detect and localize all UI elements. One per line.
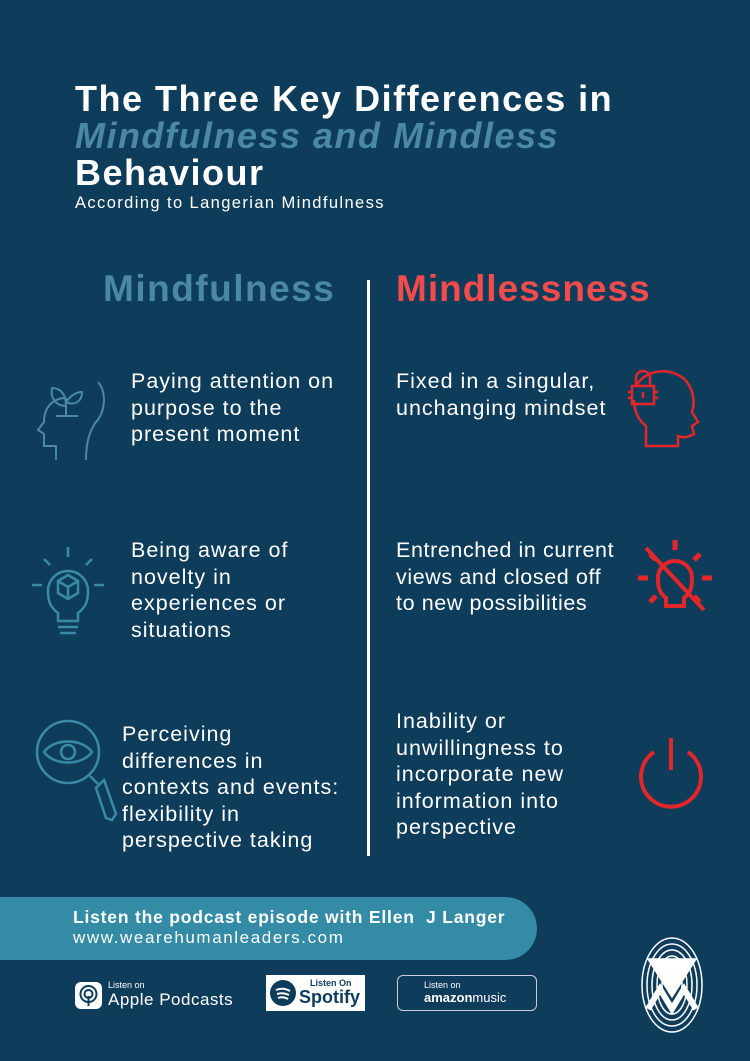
heading: Mindfulness: Mindfulness (103, 268, 335, 309)
text: mindless 3: incorporate new (396, 762, 564, 786)
badge: spotify (266, 975, 365, 1011)
badge: spotify: Spotify (299, 987, 360, 1007)
text: mindful 2: novelty in (131, 564, 232, 588)
text: mindless 3: perspective (396, 815, 517, 839)
badge: apple podcasts (75, 980, 233, 1009)
badge: amazon music (397, 975, 537, 1011)
badge: apple podcasts: Apple Podcasts (108, 990, 233, 1009)
text: mindless 2 (396, 538, 614, 615)
text: mindless 3: information into (396, 788, 559, 812)
icon: power (639, 738, 703, 809)
text: mindless 1: unchanging mindset (396, 396, 606, 420)
icon: lightbulb (32, 547, 104, 634)
text: mindful 3: differences in (122, 748, 264, 772)
icon: crossed lightbulb (638, 540, 712, 612)
text: mindful 3: flexibility in (122, 802, 240, 826)
text: mindful 3: perspective taking (122, 828, 313, 852)
banner text: Listen the podcast episode with Ellen J Langer (73, 907, 505, 927)
text: mindful 3: Perceiving (122, 722, 232, 746)
badge: amazon music: amazonmusic (424, 990, 506, 1005)
podcast banner (0, 897, 537, 960)
podcast banner: www.wearehumanleaders.com (73, 928, 344, 947)
text: mindful 2 (131, 538, 288, 642)
text: mindful 3 (122, 722, 339, 852)
heading: Mindlessness: Mindlessness (396, 268, 651, 309)
badge: spotify: Listen On (310, 978, 352, 988)
icon: head with plant (36, 382, 105, 460)
title: The Three Key Differences in (75, 78, 613, 119)
text: mindful 2: situations (131, 618, 232, 642)
text: mindful 3: contexts and events: (122, 775, 339, 799)
icon: locked head (628, 370, 700, 448)
text: mindful 1: present moment (131, 422, 300, 446)
title (75, 78, 613, 212)
text: mindful 2: Being aware of (131, 538, 288, 562)
title: According to Langerian Mindfulness (75, 194, 385, 212)
text: mindful 1: Paying attention on (131, 369, 334, 393)
text: mindful 1: purpose to the (131, 396, 282, 420)
divider line (367, 280, 370, 856)
title: Behaviour (75, 152, 265, 193)
logo: fingerprint M (641, 937, 703, 1033)
text: mindless 3: unwillingness to (396, 736, 564, 760)
text: mindless 3 (396, 709, 564, 839)
text: mindless 2: to new possibilities (396, 591, 587, 615)
text: mindless 2: views and closed off (396, 564, 601, 588)
text: mindless 2: Entrenched in current (396, 538, 614, 562)
text: mindless 3: Inability or (396, 709, 506, 733)
text: mindful 2: experiences or (131, 591, 286, 615)
text: mindless 1 (396, 369, 606, 420)
text: mindful 1 (131, 369, 334, 446)
title: Mindfulness and Mindless (75, 115, 559, 156)
text: mindless 1: Fixed in a singular, (396, 369, 595, 393)
badge: apple podcasts: Listen on (108, 980, 145, 990)
badge: amazon music: Listen on (424, 980, 461, 990)
icon: magnifier eye (36, 720, 118, 822)
